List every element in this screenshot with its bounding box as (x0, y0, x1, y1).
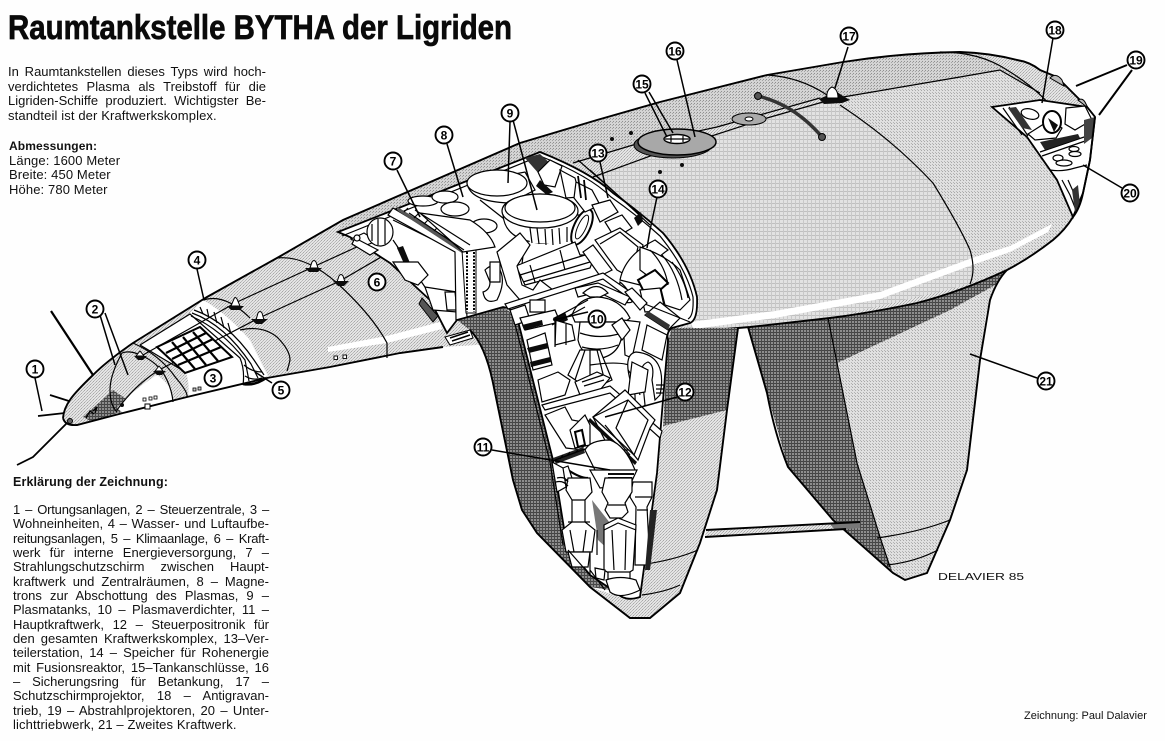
main floor beam (542, 386, 662, 438)
hull surface details: fuel ports, nodes, windows (68, 87, 850, 424)
hull panel seams (133, 343, 187, 397)
label 16 (666, 42, 684, 60)
dimensions block: Länge: 1600 Meter (9, 153, 120, 168)
connecting strut between pylons (705, 522, 860, 537)
label 4 (188, 252, 206, 268)
label 14 (650, 180, 666, 198)
legend text: 1 – Ortungsanlagen, 2 – Steuerzentrale, 3 – (13, 502, 269, 517)
shield projector dome (819, 87, 850, 104)
label 16: 16 (668, 44, 682, 58)
left column (562, 478, 595, 567)
legend text (13, 502, 270, 732)
conduits and left lower machinery (510, 300, 635, 402)
label 18 (1046, 22, 1064, 38)
label 14: 14 (651, 182, 665, 196)
radiation shield (388, 206, 476, 320)
legend text: Schutzschirmprojektor, 18 – Antigravan- (13, 688, 269, 703)
label 1: 1 (32, 362, 39, 376)
fuel rivets (610, 131, 684, 174)
legend text: reitungsanlagen, 5 – Klimaanlage, 6 – Kraft- (13, 531, 269, 546)
label 15 (634, 76, 650, 92)
intro text block: Ligriden-Schiffe produziert. Wichtigster Be- (8, 93, 266, 108)
label 17: 17 (842, 30, 856, 44)
intro text block: standteil ist der Kraftwerkskomplex. (8, 108, 217, 123)
legend text: den gesamten Kraftwerkskomplex, 13–Ver- (13, 631, 269, 646)
rear section: antigravity and drive (992, 75, 1095, 217)
intro text block: verdichtetes Plasma als Treibstoff für die (8, 79, 266, 94)
safety ring with fuel connections (634, 129, 716, 158)
label 8 (436, 126, 452, 144)
nose cap dark patch (83, 390, 132, 422)
secondary ring (732, 113, 766, 125)
main power plant reactor columns (545, 407, 657, 596)
label 9: 9 (507, 106, 514, 120)
label 2 (86, 300, 104, 318)
label 12: 12 (678, 386, 692, 400)
label 4: 4 (194, 254, 201, 268)
hull outline (63, 52, 1095, 425)
intro text block: In Raumtankstellen dieses Typs wird hoch- (8, 64, 266, 79)
dimensions block (9, 139, 120, 197)
first pylon shell (445, 307, 738, 618)
right column (630, 482, 657, 570)
nose white panel (117, 375, 173, 413)
legend text: Strahlungschutzschirm zwischen Haupt- (13, 559, 269, 574)
legend text: lichttriebwerk, 21 – Zweites Kraftwerk. (13, 717, 237, 732)
water and air ring details (191, 307, 266, 384)
label 5 (272, 382, 290, 398)
legend text: teilerstation, 14 – Speicher für Rohenergie (13, 645, 269, 660)
legend text: mit Fusionsreaktor, 15–Tankanschlüsse, 16 (13, 660, 269, 675)
label 19: 19 (1129, 54, 1143, 68)
label 3 (204, 370, 222, 386)
control positronics (588, 390, 655, 465)
label 1 (26, 360, 44, 378)
antennas at nose (17, 311, 93, 465)
label 6: 6 (374, 276, 381, 290)
main hull seams and rails (573, 70, 1040, 177)
label 20 (1122, 184, 1138, 202)
label 20: 20 (1123, 186, 1137, 200)
artist signature: DELAVIER 85 (938, 572, 1025, 583)
drawing credit: Zeichnung: Paul Dalavier (1024, 710, 1147, 722)
energy store and fusion reactor (618, 240, 690, 330)
cutaway interior (338, 152, 697, 599)
label 10 (588, 310, 606, 328)
centre column (602, 478, 640, 596)
reactor chamber behind the shield (351, 218, 458, 322)
label 11: 11 (477, 440, 490, 454)
intro text block (8, 64, 266, 123)
rail nodes (134, 260, 349, 375)
dimensions block: Abmessungen: (9, 139, 97, 153)
label 15: 15 (635, 78, 649, 92)
legend text: Wohneinheiten, 4 – Wasser- und Luftaufbe- (13, 516, 269, 531)
water and air rings (190, 300, 268, 384)
label 21 (1038, 372, 1054, 390)
rear hull plate (843, 70, 1073, 282)
plasma compressor (572, 286, 647, 358)
chamber floor (505, 273, 638, 309)
label 7: 7 (390, 154, 397, 168)
window grid, living quarters (157, 327, 232, 373)
legend text: trons zur Abschottung des Plasmas, 9 – (13, 588, 269, 603)
small hull windows (68, 355, 346, 424)
legend text: trieb, 19 – Abstrahlprojektoren, 20 – Unter- (13, 703, 269, 718)
legend heading: Erklärung der Zeichnung: (13, 475, 168, 489)
upper hull band (338, 52, 1040, 232)
main hull (63, 52, 1095, 425)
second power plant pylon (748, 270, 1007, 580)
label 10: 10 (590, 312, 604, 326)
hull highlight stripes (690, 224, 1052, 329)
title: Raumtankstelle BYTHA der Ligriden (8, 9, 512, 47)
large central hull plate (593, 102, 973, 332)
magnetrons (408, 191, 525, 301)
label 12 (676, 384, 694, 400)
legend text: – Sicherungsring für Betankung, 17 – (13, 674, 269, 689)
label 19 (1128, 52, 1144, 68)
legend text: kraftwerk und Zentralräumen, 8 – Magne- (13, 574, 269, 589)
curved bar on hull (754, 92, 826, 140)
label 18: 18 (1048, 24, 1062, 38)
legend text: Hauptkraftwerk, 12 – Steuerpositronik für (13, 617, 269, 632)
label 13: 13 (591, 146, 605, 160)
machinery below tanks (497, 228, 643, 300)
label 2: 2 (92, 302, 99, 316)
label 5: 5 (278, 384, 285, 398)
label 17 (840, 28, 858, 44)
label 8: 8 (441, 128, 448, 142)
label 11 (474, 438, 492, 456)
living quarters panel (140, 314, 243, 397)
label 9 (502, 104, 518, 122)
dimensions block: Breite: 450 Meter (9, 167, 111, 182)
label 7 (384, 152, 402, 170)
legend text: Plasmatanks, 10 – Plasmaverdichter, 11 – (13, 602, 269, 617)
label 21: 21 (1039, 374, 1053, 388)
label 6 (368, 274, 386, 290)
label 13 (590, 144, 606, 162)
distribution station (525, 154, 650, 238)
legend text: werk für interne Energieversorgung, 7 – (13, 545, 269, 560)
label 3: 3 (210, 372, 217, 386)
curved pipe right (628, 325, 667, 408)
dimensions block: Höhe: 780 Meter (9, 182, 108, 197)
plasma tanks (467, 170, 597, 248)
callout leader lines (35, 38, 1132, 470)
